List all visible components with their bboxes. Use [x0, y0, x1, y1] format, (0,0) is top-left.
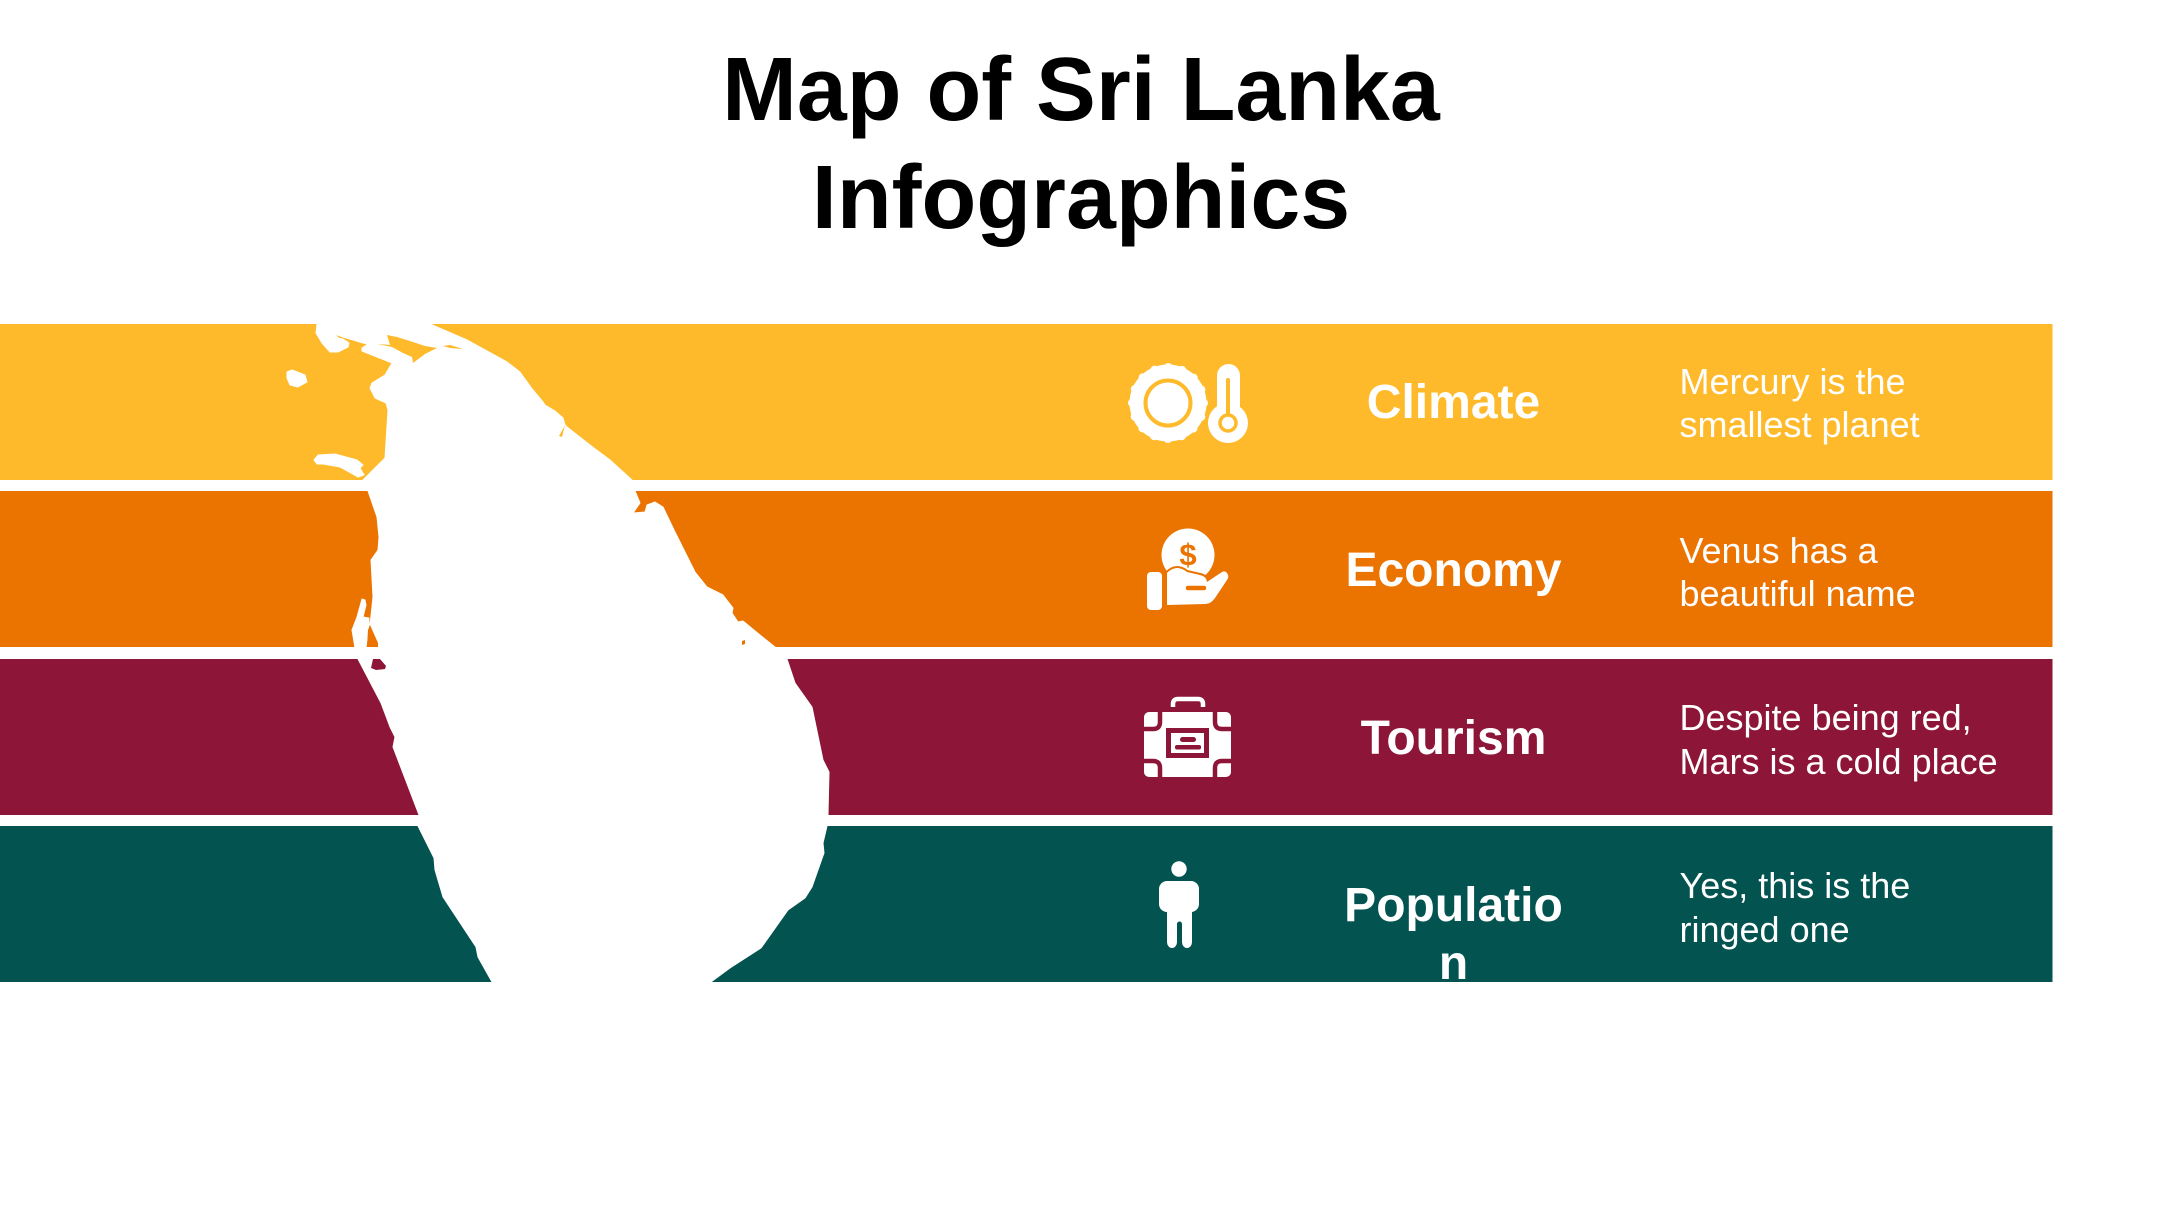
text: economy description: Venus has a	[1680, 530, 1879, 571]
text: tourism description	[1680, 697, 1998, 782]
text: climate description: smallest planet	[1680, 404, 1920, 445]
row: tourism	[1143, 697, 1998, 782]
panel: tourism band	[0, 659, 2052, 815]
title	[722, 40, 1441, 248]
text: tourism description: Despite being red,	[1680, 697, 1972, 738]
row: economy	[1147, 528, 1916, 614]
heading: population: n	[1439, 937, 1468, 990]
text: population description: Yes, this is the	[1680, 865, 1910, 906]
title: Map of Sri Lanka	[722, 40, 1441, 140]
row: climate	[1130, 361, 1920, 445]
icon: person	[1159, 861, 1199, 948]
panel: climate band	[0, 324, 2052, 480]
text: climate description: Mercury is the	[1680, 361, 1906, 402]
heading: climate: Climate	[1367, 376, 1540, 429]
text: tourism description: Mars is a cold place	[1680, 741, 1998, 782]
icon: hand holding coin	[1147, 528, 1228, 610]
heading: population	[1344, 879, 1563, 990]
text: climate description	[1680, 361, 1920, 445]
title: Infographics	[812, 148, 1350, 248]
text: population description: ringed one	[1680, 909, 1850, 950]
text: economy description: beautiful name	[1680, 573, 1916, 614]
text: economy description	[1680, 530, 1916, 614]
row: population	[1159, 861, 1910, 990]
icon: sun and thermometer	[1130, 364, 1248, 443]
map of Sri Lanka	[287, 324, 829, 983]
text: population description	[1680, 865, 1910, 950]
panel: population band	[0, 826, 2052, 982]
heading: tourism: Tourism	[1361, 712, 1546, 765]
icon: hand holding coin: $	[1179, 537, 1197, 572]
heading: population: Populatio	[1344, 879, 1563, 932]
heading: economy: Economy	[1345, 544, 1562, 597]
panel: economy band	[0, 491, 2052, 647]
icon: suitcase	[1143, 699, 1232, 778]
